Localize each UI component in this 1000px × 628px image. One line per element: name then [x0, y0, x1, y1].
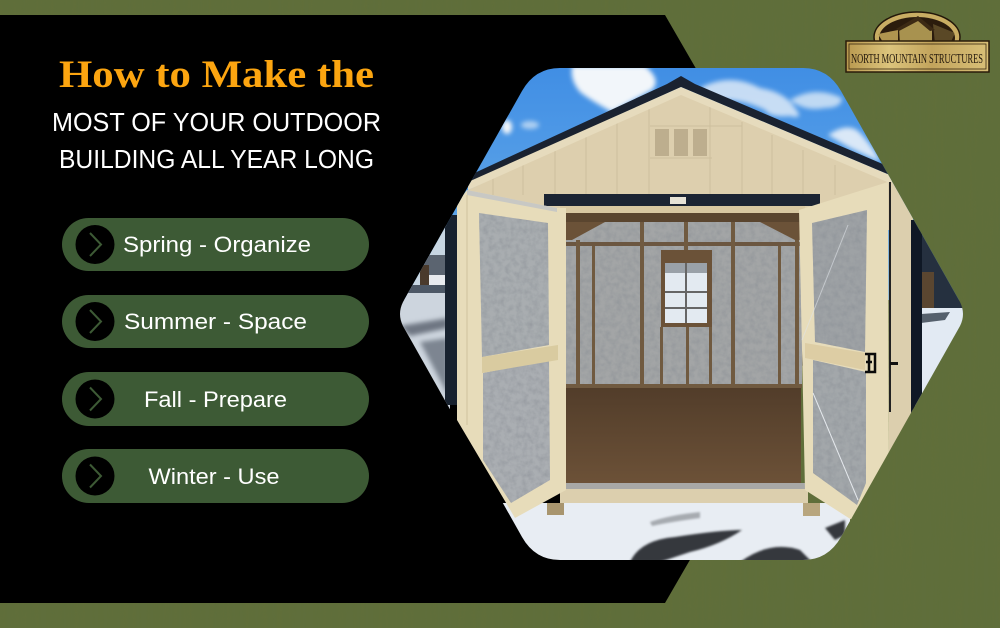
title [52, 53, 381, 174]
logo: north mountain structures [846, 12, 989, 72]
interior studs [565, 222, 802, 388]
roof [468, 76, 892, 183]
floor [566, 388, 801, 487]
siding lines and vent [493, 106, 835, 195]
snowy ground [500, 503, 850, 563]
pill: winter [62, 449, 369, 503]
background ground and building left [400, 225, 450, 410]
panel: black background shape [0, 15, 835, 603]
right door [799, 182, 898, 522]
left dark trim [445, 215, 457, 405]
background building and snow right [915, 230, 963, 406]
header trim [560, 206, 805, 213]
pill: fall: Fall - Prepare [144, 387, 287, 412]
door latch [865, 354, 875, 372]
pill: winter: Winter - Use [148, 464, 280, 489]
pill: fall [62, 372, 369, 426]
sky [395, 60, 970, 300]
gable wall [468, 90, 900, 230]
right side wall and trim [889, 182, 922, 482]
pill: spring: Spring - Organize [123, 232, 311, 257]
pill: summer: Summer - Space [124, 309, 307, 334]
pill: summer [62, 295, 369, 348]
right door insulation panels [812, 210, 867, 352]
pill: spring [62, 218, 369, 271]
header bar [544, 194, 820, 206]
photo: shed in hexagon frame [395, 60, 970, 563]
left door [457, 190, 566, 518]
subheading line one: MOST OF YOUR OUTDOOR [52, 107, 381, 137]
interior window [661, 250, 712, 327]
threshold plate and sill [560, 483, 808, 503]
header logo badge [670, 197, 686, 204]
subheading line two: BUILDING ALL YEAR LONG [59, 144, 374, 174]
interior back wall [565, 213, 802, 388]
interior rafters [565, 213, 802, 246]
clouds [502, 66, 880, 162]
roof trim [468, 87, 892, 190]
heading: how to make the: How to Make the [59, 53, 374, 96]
left door insulation panels [479, 213, 549, 357]
